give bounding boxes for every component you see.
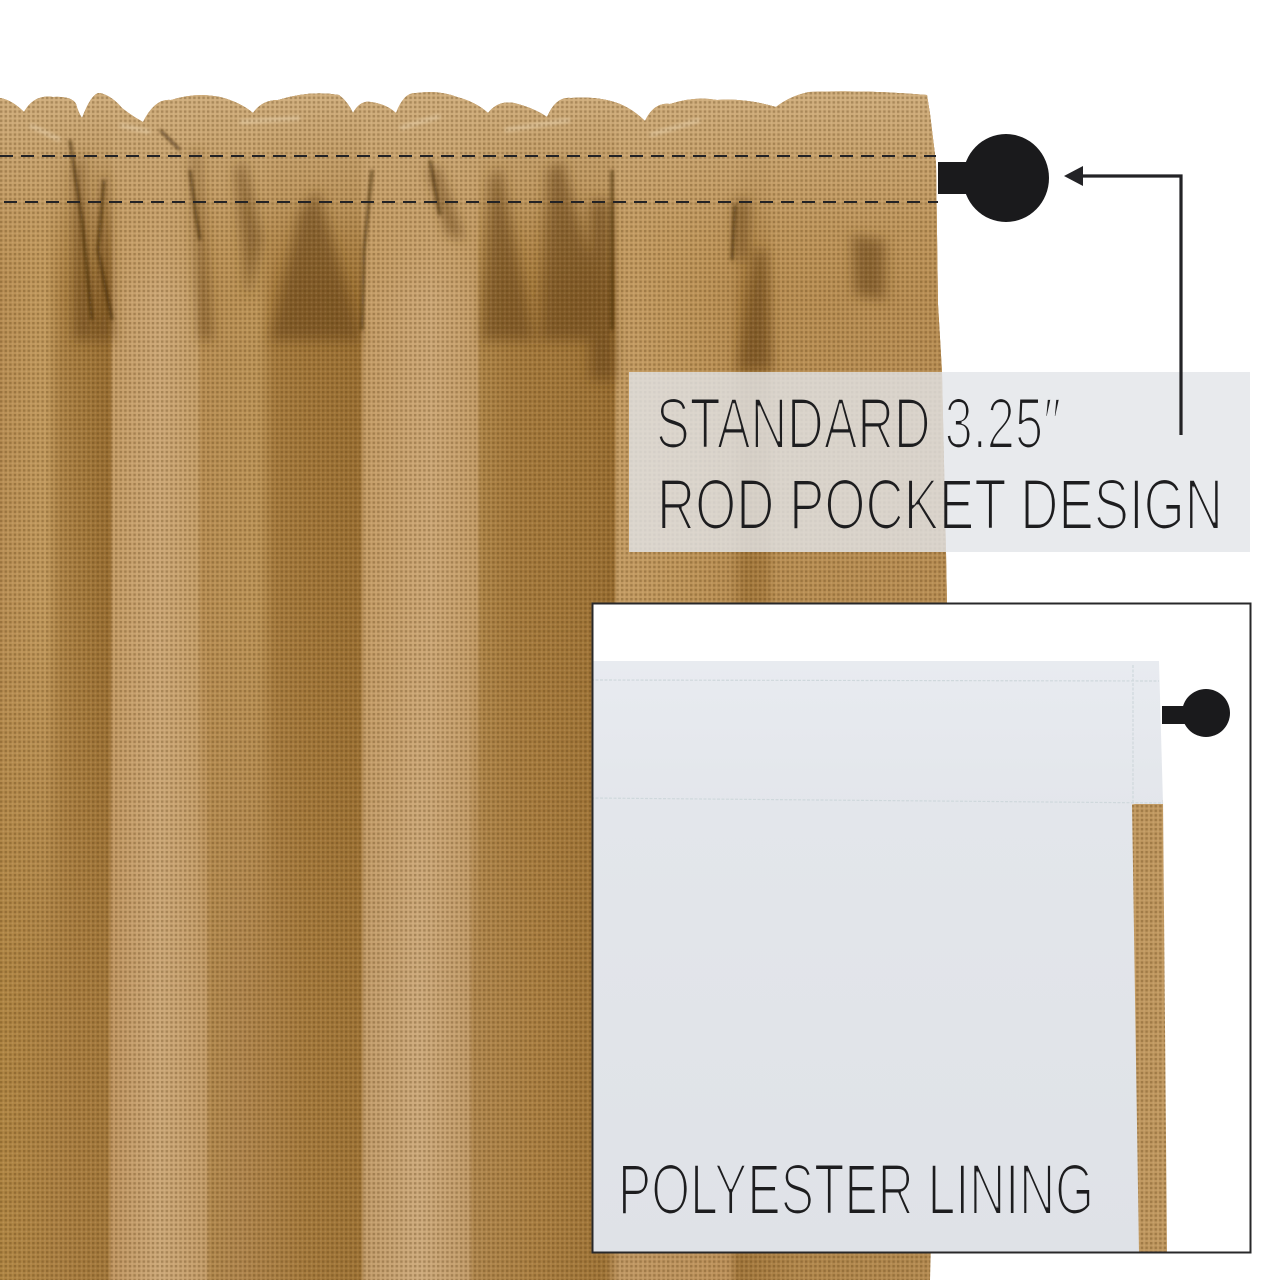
callout: rod pocket label band xyxy=(629,372,1250,552)
curtain: burlap fabric panel with folds xyxy=(0,85,950,1280)
icon: small rod with finial xyxy=(1162,689,1230,737)
frame xyxy=(592,604,1250,1252)
white lining fabric xyxy=(591,661,1163,1253)
text: standard 3.25 inch: STANDARD 3.25″ xyxy=(656,385,1061,464)
icon: curtain rod with ball finial xyxy=(938,134,1049,222)
arrow: from label to rod xyxy=(1064,166,1181,435)
panel: polyester lining inset xyxy=(591,603,1251,1253)
text: polyester lining: POLYESTER LINING xyxy=(618,1151,1094,1230)
burlap edge strip xyxy=(1132,800,1167,1252)
rod pocket stitch lines xyxy=(0,156,938,202)
